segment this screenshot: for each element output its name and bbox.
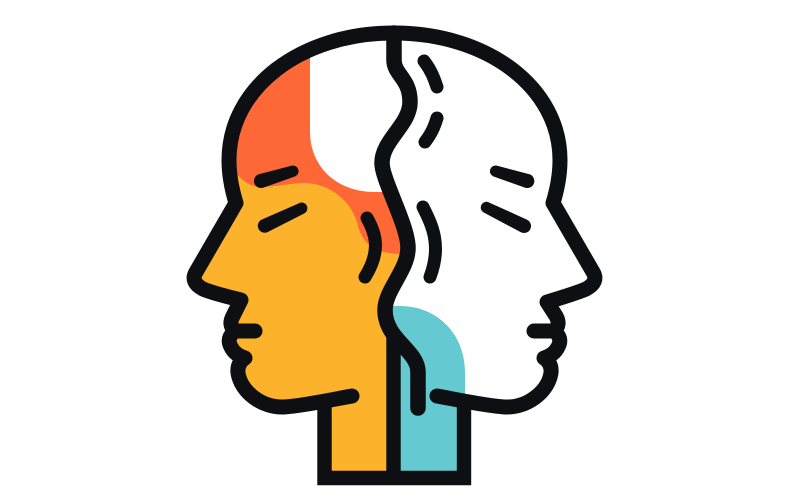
fill: yellow left face [195, 170, 404, 478]
wrinkles [365, 61, 437, 277]
fill: red-orange brain region [229, 50, 408, 262]
right face outline [394, 33, 595, 407]
outlines of both faces [194, 33, 595, 408]
neck outline [324, 335, 464, 478]
mouth lines [235, 324, 554, 338]
left face outline [194, 33, 394, 407]
brows [254, 165, 534, 233]
fill: teal right neck [388, 306, 465, 478]
central wavy divider [382, 33, 418, 408]
